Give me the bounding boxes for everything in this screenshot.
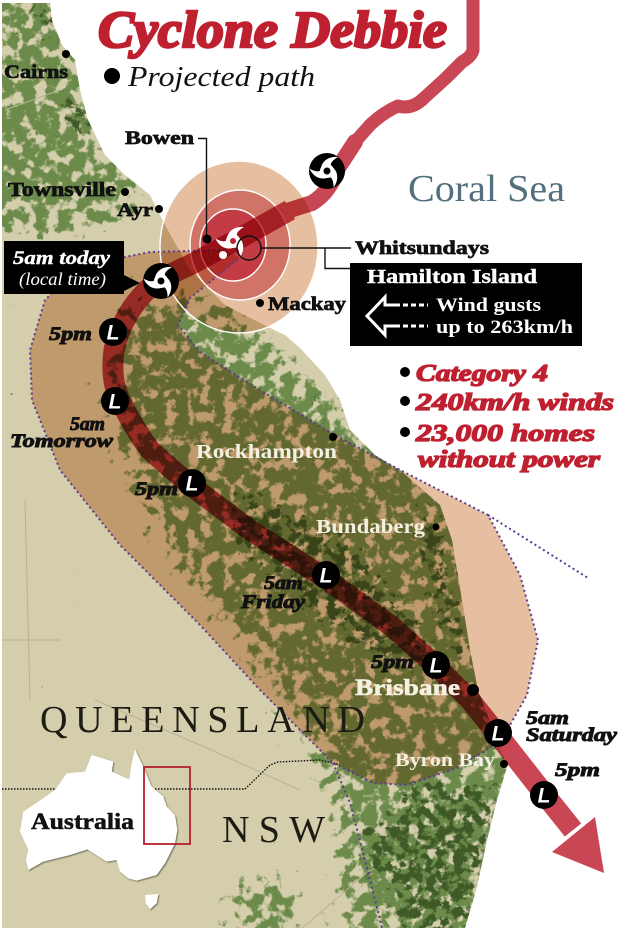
cyclone icon: ahead of landfall bbox=[309, 153, 345, 189]
callout: 5am today bbox=[4, 241, 140, 294]
place labels: Whitsundays bbox=[355, 238, 489, 259]
low markers: L bbox=[538, 784, 550, 808]
low markers: L bbox=[430, 654, 442, 678]
timeline labels: Tomorrow bbox=[10, 431, 113, 452]
timeline labels bbox=[10, 324, 618, 781]
key facts bbox=[400, 361, 614, 473]
cyclone icon: current position bbox=[215, 227, 248, 259]
callout: Hamilton Island wind gusts: up to 263km/h bbox=[436, 317, 574, 338]
place labels: Rockhampton bbox=[196, 441, 337, 463]
low markers bbox=[99, 318, 558, 809]
key facts: 23,000 homes bbox=[415, 421, 595, 447]
legend: projected path: Projected path bbox=[127, 61, 315, 93]
place labels: Bowen bbox=[125, 128, 195, 149]
key facts: Category 4 bbox=[416, 361, 548, 387]
low markers: L bbox=[320, 564, 332, 588]
cone outline bbox=[30, 250, 588, 928]
timeline labels: Saturday bbox=[526, 725, 618, 746]
low markers: L bbox=[186, 472, 198, 496]
place labels bbox=[4, 50, 508, 771]
locator map: Australia bbox=[20, 749, 190, 909]
timeline labels: 5am bbox=[70, 414, 105, 435]
place labels: Townsville bbox=[8, 179, 116, 201]
state label: Queensland: QUEENSLAND bbox=[40, 699, 365, 741]
place labels: Ayr bbox=[117, 200, 154, 221]
low markers: L bbox=[492, 722, 504, 746]
low markers: L bbox=[109, 390, 121, 414]
cyclone icon: 5am today bbox=[143, 263, 179, 299]
state border bbox=[2, 760, 340, 789]
dark-green vegetation bbox=[25, 0, 500, 932]
roads and rivers bbox=[0, 90, 370, 930]
heading: Coral Sea: Coral Sea bbox=[408, 168, 565, 210]
forecast cone bbox=[30, 250, 538, 785]
place labels: Byron Bay bbox=[395, 750, 496, 771]
place labels: Brisbane bbox=[355, 675, 460, 700]
timeline labels: 5am bbox=[264, 573, 303, 594]
projected path arrow bbox=[113, 0, 604, 873]
locator map: Australia: Australia bbox=[31, 809, 135, 834]
timeline labels: 5pm bbox=[135, 479, 178, 500]
low markers: L bbox=[107, 322, 119, 344]
callout: 5am today: 5am today bbox=[13, 248, 111, 269]
key facts: 240km/h winds bbox=[415, 390, 614, 416]
timeline labels: 5pm bbox=[371, 652, 414, 673]
timeline labels: Friday bbox=[240, 592, 306, 613]
timeline labels: 5pm bbox=[49, 324, 92, 345]
callout: Hamilton Island wind gusts: Hamilton Island bbox=[367, 266, 537, 288]
timeline labels: 5am bbox=[526, 708, 569, 729]
title: Cyclone Debbie bbox=[98, 2, 447, 59]
state label: NSW: NSW bbox=[222, 809, 325, 851]
callout: 5am today: (local time) bbox=[19, 269, 106, 290]
wind ring outlines bbox=[160, 161, 318, 333]
place labels: Bundaberg bbox=[316, 516, 425, 538]
callout: Hamilton Island wind gusts bbox=[350, 263, 582, 346]
timeline labels: 5pm bbox=[555, 760, 600, 781]
key facts: without power bbox=[418, 447, 601, 473]
wind zones bbox=[160, 161, 318, 333]
place labels: Mackay bbox=[268, 294, 347, 315]
place labels: Cairns bbox=[4, 62, 68, 83]
callout: Hamilton Island wind gusts: Wind gusts bbox=[436, 295, 541, 316]
